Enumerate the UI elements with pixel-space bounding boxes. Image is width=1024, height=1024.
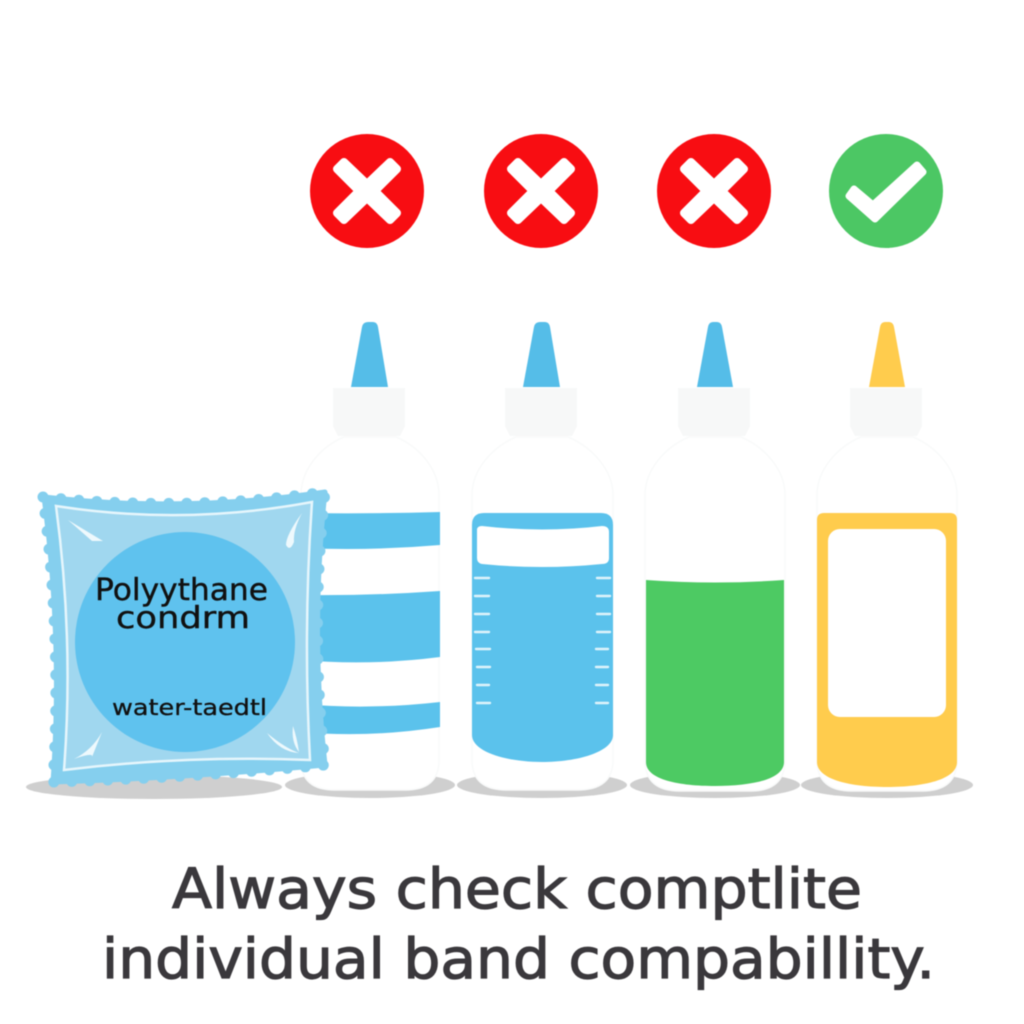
packet label circle [75, 532, 295, 752]
bottle 2: blue with measuring marks [457, 322, 627, 798]
icon: green check [829, 134, 943, 248]
packet corner highlights [68, 513, 302, 759]
packet scalloped edge [43, 492, 325, 782]
packet text: Polyythane: Polyythane [95, 573, 268, 608]
caption line 2: individual band compabillity. [102, 927, 935, 991]
icon: red cross 3 [657, 134, 771, 248]
packet text: water-taedtl: water-taedtl [112, 696, 267, 721]
bottle 1: blue striped [285, 322, 455, 798]
caption line 1: Always check comptlite [172, 857, 862, 921]
packet inner film [56, 502, 312, 770]
packet body [44, 492, 325, 782]
condom packet [43, 492, 325, 782]
icon: red cross 2 [484, 134, 598, 248]
bottle 3: green [630, 322, 800, 798]
icon: red cross 1 [310, 134, 424, 248]
bottle 4: yellow, compatible [801, 322, 973, 798]
packet text: condrm: condrm [116, 601, 250, 636]
shadow under condom packet [26, 775, 282, 799]
